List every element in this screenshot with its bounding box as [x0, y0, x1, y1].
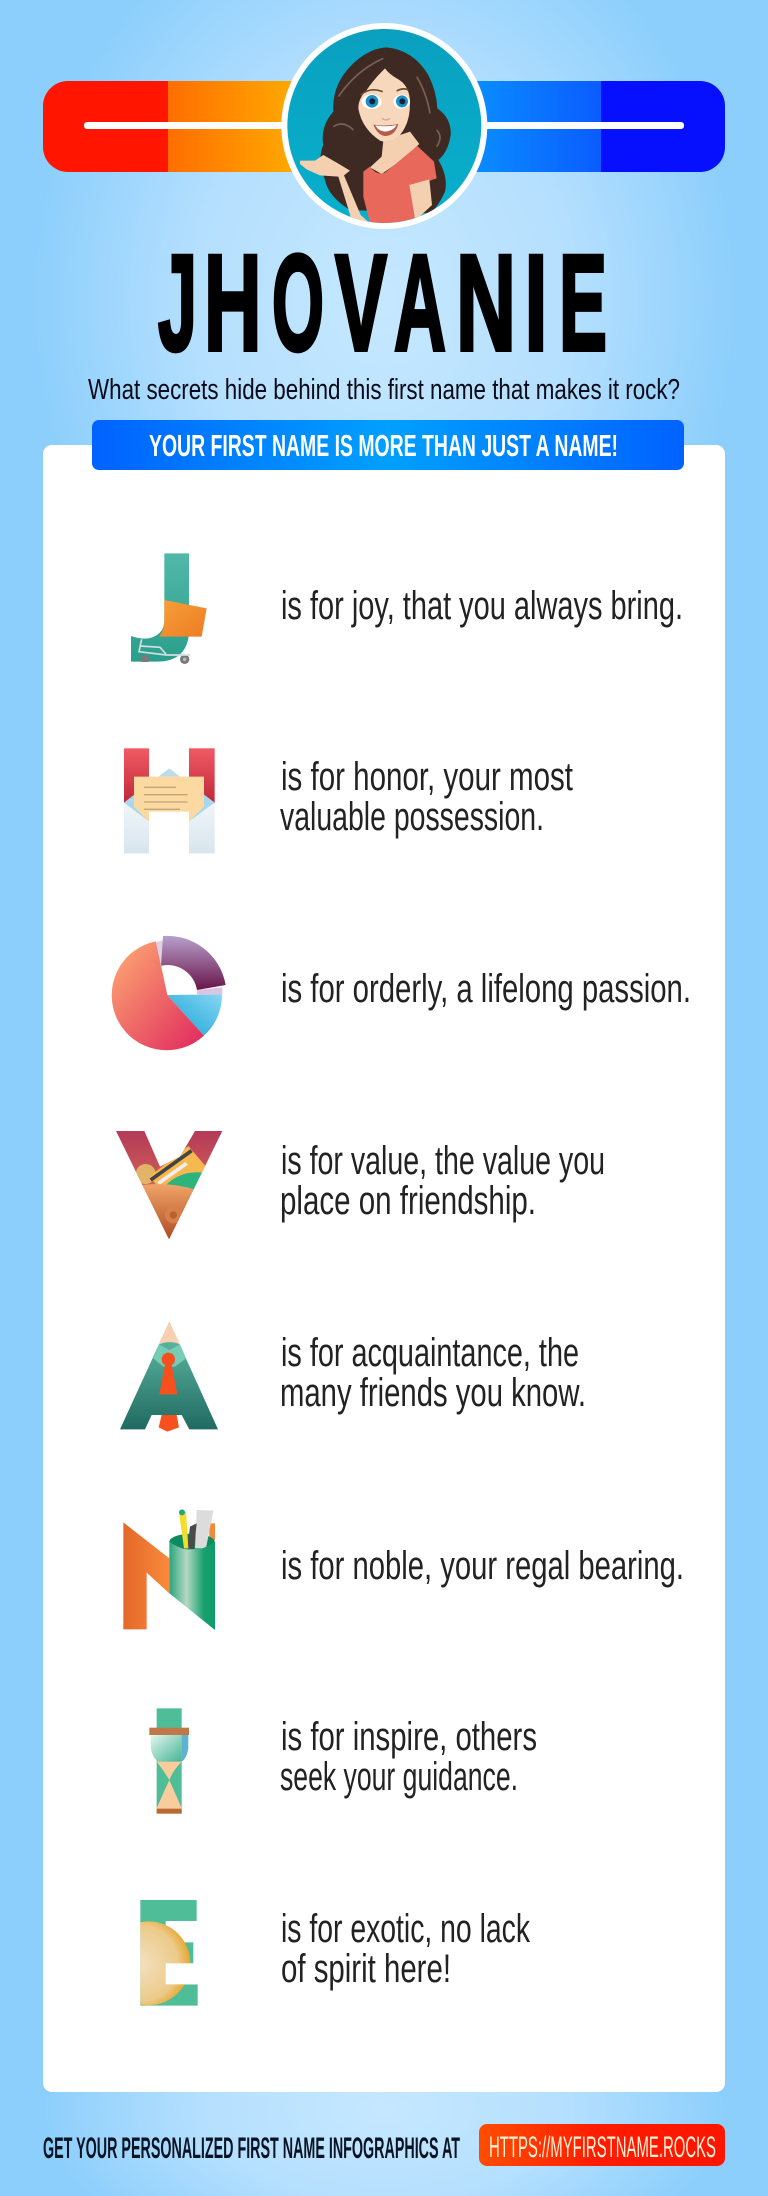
title: I	[524, 227, 548, 380]
title	[158, 227, 607, 380]
icon: letter V wallet	[116, 1131, 222, 1239]
title: E	[559, 227, 607, 380]
text: H lines: valuable possession.	[280, 795, 544, 839]
white content panel	[43, 445, 725, 2092]
shirt	[363, 146, 437, 223]
icon: letter J shopping cart	[131, 553, 207, 664]
text: E lines: is for exotic, no lack	[281, 1907, 531, 1951]
header bar	[43, 81, 725, 172]
banner	[92, 420, 684, 470]
text: V lines: place on friendship.	[280, 1179, 536, 1223]
right arm	[409, 179, 432, 221]
text: E lines	[281, 1907, 531, 1991]
hair	[320, 47, 451, 213]
left arm and hand	[300, 155, 370, 223]
footer url button	[479, 2124, 725, 2166]
icon: letter E moon	[140, 1900, 198, 2006]
icon: letter H envelope	[124, 748, 215, 853]
eyes	[362, 94, 382, 109]
title: N	[456, 227, 516, 380]
title: H	[204, 227, 262, 380]
text: V lines: is for value, the value you	[281, 1139, 605, 1183]
icon: letter A suit and tie	[120, 1322, 218, 1432]
neck and chest	[370, 132, 419, 174]
title: V	[335, 227, 387, 380]
text: H lines: is for honor, your most	[281, 755, 573, 799]
text: A lines: is for acquaintance, the	[281, 1331, 579, 1375]
text: I lines: seek your guidance.	[280, 1755, 518, 1799]
text: E lines: of spirit here!	[281, 1947, 451, 1991]
mouth	[373, 124, 398, 136]
text: V lines	[280, 1139, 605, 1223]
eyebrows	[361, 89, 408, 95]
text: H lines	[280, 755, 573, 839]
title: O	[272, 227, 324, 380]
text: I lines	[280, 1715, 537, 1799]
avatar portrait	[281, 23, 487, 229]
text: A lines	[280, 1331, 586, 1415]
icon: letter I hourglass	[149, 1708, 189, 1814]
title: A	[394, 227, 446, 380]
face	[358, 68, 410, 142]
text: A lines: many friends you know.	[280, 1371, 586, 1415]
text: I lines: is for inspire, others	[281, 1715, 537, 1759]
icon: letter O pie chart	[112, 936, 226, 1050]
title: J	[158, 227, 197, 380]
icon: letter N pen holder	[123, 1509, 215, 1630]
